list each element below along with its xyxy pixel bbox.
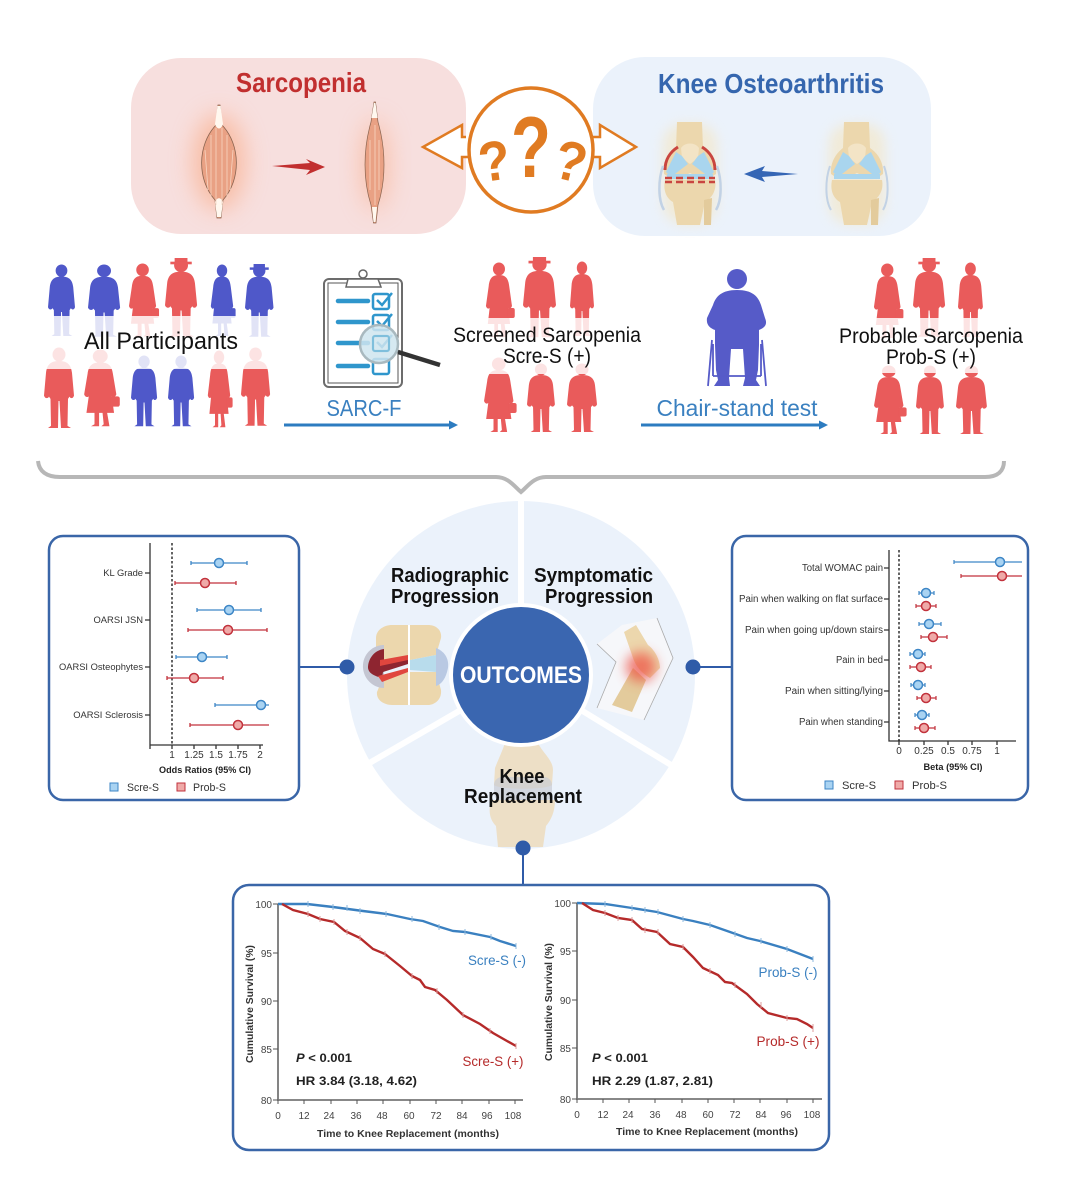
chart: Prob-S survival bbox=[544, 899, 822, 1138]
people group: screened sarcopenia bbox=[453, 257, 641, 432]
legend: Prob-S bbox=[193, 782, 226, 794]
diagram: outcomes wheel bbox=[347, 495, 695, 849]
chart: Prob-S survival: 0 bbox=[574, 1110, 580, 1121]
title: radiographic progression: Radiographic bbox=[391, 565, 509, 587]
title: knee osteoarthritis: Knee Osteoarthritis bbox=[658, 68, 884, 99]
chart: Prob-S survival: 72 bbox=[729, 1110, 741, 1121]
arrow: left to sarcopenia bbox=[423, 125, 470, 168]
brace bbox=[38, 461, 1004, 492]
icon: knee replacement bbox=[490, 743, 555, 847]
chart: Prob-S survival: 48 bbox=[675, 1110, 687, 1121]
arrow: chair-stand test bbox=[641, 420, 828, 430]
chart: Scre-S survival: Cumulative Survival (%) bbox=[245, 945, 256, 1063]
label: screened sarcopenia: Scre-S (+) bbox=[503, 345, 591, 368]
chart: Scre-S survival bbox=[245, 900, 526, 1140]
panel: knee replacement survival curves bbox=[233, 885, 829, 1150]
chart: Scre-S survival: 90 bbox=[261, 997, 272, 1008]
label: probable sarcopenia: Prob-S (+) bbox=[886, 346, 976, 369]
node: bottom bbox=[516, 840, 530, 856]
people group: all participants bbox=[40, 258, 280, 428]
chart axes: 2 bbox=[257, 750, 263, 761]
icon: question marks bbox=[469, 88, 593, 212]
chart: Prob-S survival: Prob-S (+) bbox=[756, 1033, 820, 1049]
chart: Prob-S survival: 100 bbox=[554, 899, 571, 910]
icon: question marks: ? bbox=[548, 128, 593, 196]
chart: Prob-S survival: 60 bbox=[702, 1110, 714, 1121]
chart axes: 0.5 bbox=[941, 746, 955, 757]
chart: Prob-S survival: 96 bbox=[780, 1110, 792, 1121]
title: radiographic progression: Progression bbox=[391, 586, 499, 608]
chart: Scre-S survival: 84 bbox=[456, 1111, 468, 1122]
arrow: knee degeneration bbox=[744, 166, 798, 182]
legend: Prob-S bbox=[912, 780, 947, 792]
chart axes: 1.5 bbox=[209, 750, 223, 761]
chart: Scre-S survival: 85 bbox=[261, 1045, 272, 1056]
chart: Prob-S survival: 80 bbox=[560, 1095, 571, 1106]
chart: Scre-S survival: Time to Knee Replacement (months) bbox=[317, 1128, 499, 1140]
people group: probable sarcopenia bbox=[839, 258, 1023, 434]
chart: Prob-S survival: 90 bbox=[560, 996, 571, 1007]
chart axes: Beta (95% CI) bbox=[924, 762, 982, 773]
chart: Scre-S survival: P < 0.001 bbox=[296, 1051, 352, 1065]
chart: Scre-S survival: 12 bbox=[298, 1111, 310, 1122]
center: outcomes: OUTCOMES bbox=[460, 662, 582, 689]
chart axes: 0 bbox=[896, 746, 902, 757]
panel: radiographic forest plot bbox=[49, 536, 299, 800]
icon: atrophied muscle bbox=[361, 102, 389, 223]
chart: Prob-S survival: 84 bbox=[755, 1110, 767, 1121]
legend: Scre-S bbox=[127, 782, 159, 794]
chart axes: Pain in bed bbox=[836, 655, 883, 666]
title: sarcopenia: Sarcopenia bbox=[236, 67, 366, 98]
arrow: muscle loss bbox=[272, 159, 325, 175]
chart axes: OARSI Osteophytes bbox=[59, 661, 143, 672]
legend: Scre-S bbox=[842, 780, 876, 792]
chart: Scre-S survival: 96 bbox=[481, 1111, 493, 1122]
data: Prob-S odds ratios bbox=[167, 578, 269, 730]
label: probable sarcopenia bbox=[839, 325, 1023, 369]
icon: question marks: ? bbox=[511, 100, 551, 196]
chart: Prob-S survival: Cumulative Survival (%) bbox=[544, 943, 555, 1061]
chart: Prob-S survival: P < 0.001 bbox=[592, 1051, 648, 1065]
chart: Scre-S survival: Scre-S (-) bbox=[468, 952, 526, 968]
label: chair-stand test: Chair-stand test bbox=[656, 395, 818, 421]
chart axes: Pain when sitting/lying bbox=[785, 686, 883, 697]
panel: knee osteoarthritis bbox=[593, 57, 931, 236]
label: probable sarcopenia: Probable Sarcopenia bbox=[839, 325, 1023, 348]
title: knee replacement: Replacement bbox=[464, 786, 582, 808]
chart: Scre-S survival: 0 bbox=[275, 1111, 281, 1122]
label: screened sarcopenia: Screened Sarcopenia bbox=[453, 324, 641, 347]
chart: Scre-S survival: 95 bbox=[261, 949, 272, 960]
chart: Prob-S survival: 24 bbox=[622, 1110, 634, 1121]
chart axes: 1.75 bbox=[228, 750, 248, 761]
label: SARC-F: SARC-F bbox=[326, 395, 402, 421]
chart: Prob-S survival: 95 bbox=[560, 947, 571, 958]
chart: Scre-S survival: 24 bbox=[323, 1111, 335, 1122]
chart axes: Pain when going up/down stairs bbox=[745, 625, 883, 636]
node: right bbox=[686, 660, 700, 674]
chart: Prob-S survival: 85 bbox=[560, 1044, 571, 1055]
chart axes: Total WOMAC pain bbox=[802, 563, 883, 574]
chart axes: Pain when standing bbox=[799, 717, 883, 728]
data: Prob-S betas bbox=[910, 572, 1022, 732]
chart: Scre-S survival: Scre-S (+) bbox=[462, 1053, 524, 1069]
chart axes bbox=[59, 543, 263, 776]
chart: Scre-S survival: 100 bbox=[255, 900, 272, 911]
panel: symptomatic forest plot bbox=[732, 536, 1028, 800]
chart axes: OARSI JSN bbox=[94, 614, 143, 625]
data: Scre-S odds ratios bbox=[176, 558, 269, 710]
chart axes: 1.25 bbox=[184, 750, 204, 761]
icon: question marks: ? bbox=[474, 128, 514, 195]
chart: Prob-S survival: HR 2.29 (1.87, 2.81) bbox=[592, 1074, 713, 1088]
center: outcomes bbox=[449, 603, 593, 747]
connector: left bbox=[299, 667, 732, 885]
chart: Prob-S survival: 36 bbox=[649, 1110, 661, 1121]
chart axes: 0.25 bbox=[914, 746, 934, 757]
chart: Scre-S survival: 36 bbox=[350, 1111, 362, 1122]
icon: healthy muscle bbox=[193, 105, 245, 218]
chart axes bbox=[739, 550, 1016, 773]
chart axes: 1 bbox=[994, 746, 1000, 757]
title: symptomatic progression: Progression bbox=[545, 586, 653, 608]
title: radiographic progression bbox=[391, 565, 509, 608]
chart axes: 0.75 bbox=[962, 746, 982, 757]
title: knee replacement: Knee bbox=[500, 766, 544, 788]
title: symptomatic progression: Symptomatic bbox=[534, 565, 653, 587]
icon: painful knee bbox=[597, 618, 673, 720]
title: symptomatic progression bbox=[534, 565, 653, 608]
data: Scre-S betas bbox=[910, 558, 1022, 720]
node: left bbox=[340, 660, 354, 674]
chart: Prob-S survival: 12 bbox=[597, 1110, 609, 1121]
chart: Prob-S survival: 108 bbox=[804, 1110, 821, 1121]
icon: healthy knee bbox=[826, 122, 888, 225]
chart axes: 1 bbox=[169, 750, 175, 761]
chart: Scre-S survival: HR 3.84 (3.18, 4.62) bbox=[296, 1074, 417, 1088]
chart axes: KL Grade bbox=[103, 567, 143, 578]
chart: Scre-S survival: 72 bbox=[430, 1111, 442, 1122]
chart axes: Pain when walking on flat surface bbox=[739, 594, 883, 605]
icon: radiographic joint bbox=[363, 625, 448, 705]
chart: Scre-S survival: 80 bbox=[261, 1096, 272, 1107]
label: screened sarcopenia bbox=[453, 324, 641, 368]
chart: Prob-S survival: Time to Knee Replacement (months) bbox=[616, 1126, 798, 1138]
legend bbox=[110, 782, 226, 794]
chart axes: OARSI Sclerosis bbox=[73, 709, 143, 720]
chart: Scre-S survival: 48 bbox=[376, 1111, 388, 1122]
panel: sarcopenia bbox=[131, 58, 466, 234]
chart: Prob-S survival: Prob-S (-) bbox=[758, 964, 818, 980]
chart: Scre-S survival: 60 bbox=[403, 1111, 415, 1122]
icon: osteoarthritic knee bbox=[659, 122, 721, 225]
chart axes: Odds Ratios (95% CI) bbox=[159, 765, 251, 776]
arrow: right to knee osteoarthritis bbox=[590, 125, 636, 168]
chart: Scre-S survival: 108 bbox=[505, 1111, 522, 1122]
title: knee replacement bbox=[464, 766, 582, 808]
icon: seated person bbox=[707, 269, 766, 386]
label: all participants: All Participants bbox=[84, 328, 238, 355]
legend bbox=[825, 780, 947, 792]
icon: clipboard checklist bbox=[324, 270, 440, 387]
arrow: SARC-F bbox=[284, 420, 458, 430]
